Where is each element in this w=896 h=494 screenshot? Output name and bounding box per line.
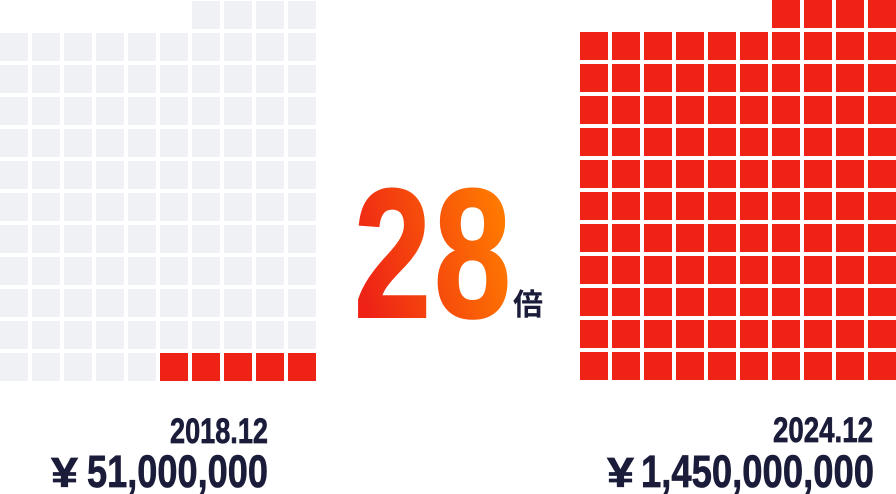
grey squares xyxy=(0,1,316,381)
label: 2018 amount xyxy=(51,446,268,494)
big number 28 xyxy=(354,150,511,356)
label: 2024 date: 2024.12 xyxy=(773,411,873,450)
unit: 倍: 倍 xyxy=(513,289,543,322)
red squares xyxy=(160,353,316,381)
label: 2018 date: 2018.12 xyxy=(170,412,268,451)
big number 28: 8 xyxy=(434,150,511,356)
multiplier: 28 times xyxy=(354,150,543,356)
panel: 2024 square grid xyxy=(580,0,896,380)
big number 28: 2 xyxy=(354,150,431,356)
panel: 2018 square grid xyxy=(0,1,316,381)
